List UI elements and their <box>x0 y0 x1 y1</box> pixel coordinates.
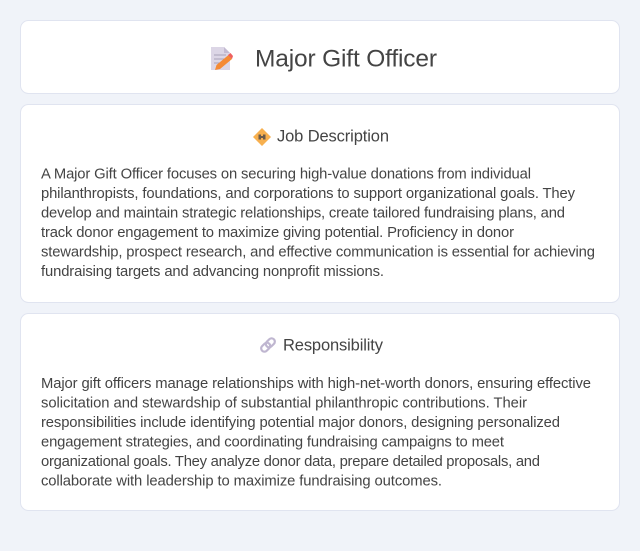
text block: responsibility <box>41 376 591 490</box>
text block: responsibility: solicitation and stewardship of substantial philanthropic contributions. Their <box>41 396 527 412</box>
text block: responsibility: engagement strategies, and coordinating fundraising campaigns to meet <box>41 434 504 450</box>
panel: title <box>20 20 620 94</box>
text block: job description: track donor engagement to maximize giving potential. Proficiency in donor <box>41 225 514 241</box>
text block: job description: stewardship, prospect research, and effective communication is essential for achieving <box>41 244 595 260</box>
icon: diamond sign <box>253 128 271 146</box>
heading: job description: Job Description <box>277 128 389 146</box>
panel: job description <box>20 104 620 302</box>
text block: job description: develop and maintain strategic relationships, create tailored fundraising plans, and <box>41 206 565 222</box>
text block: job description: A Major Gift Officer focuses on securing high-value donations from individual <box>41 166 531 182</box>
text block: job description: fundraising targets and advancing nonprofit missions. <box>41 264 384 280</box>
text block: job description: philanthropists, foundations, and corporations to support organizational goals. They <box>41 186 576 202</box>
icon: chain link <box>260 337 276 353</box>
title text: Major Gift Officer <box>255 46 437 72</box>
icon: document with pencil <box>211 47 233 70</box>
heading: responsibility: Responsibility <box>283 336 384 354</box>
text block: responsibility: Major gift officers manage relationships with high-net-worth donors, ensuring effective <box>41 376 591 392</box>
text block: responsibility: collaborate with leadership to maximize fundraising outcomes. <box>41 474 442 490</box>
text block: responsibility: organizational goals. They analyze donor data, prepare detailed proposals, and <box>41 454 540 470</box>
text block: responsibility: responsibilities include identifying potential major donors, designing personalized <box>41 415 560 431</box>
text block: job description <box>41 166 595 280</box>
panel: responsibility <box>20 314 620 510</box>
